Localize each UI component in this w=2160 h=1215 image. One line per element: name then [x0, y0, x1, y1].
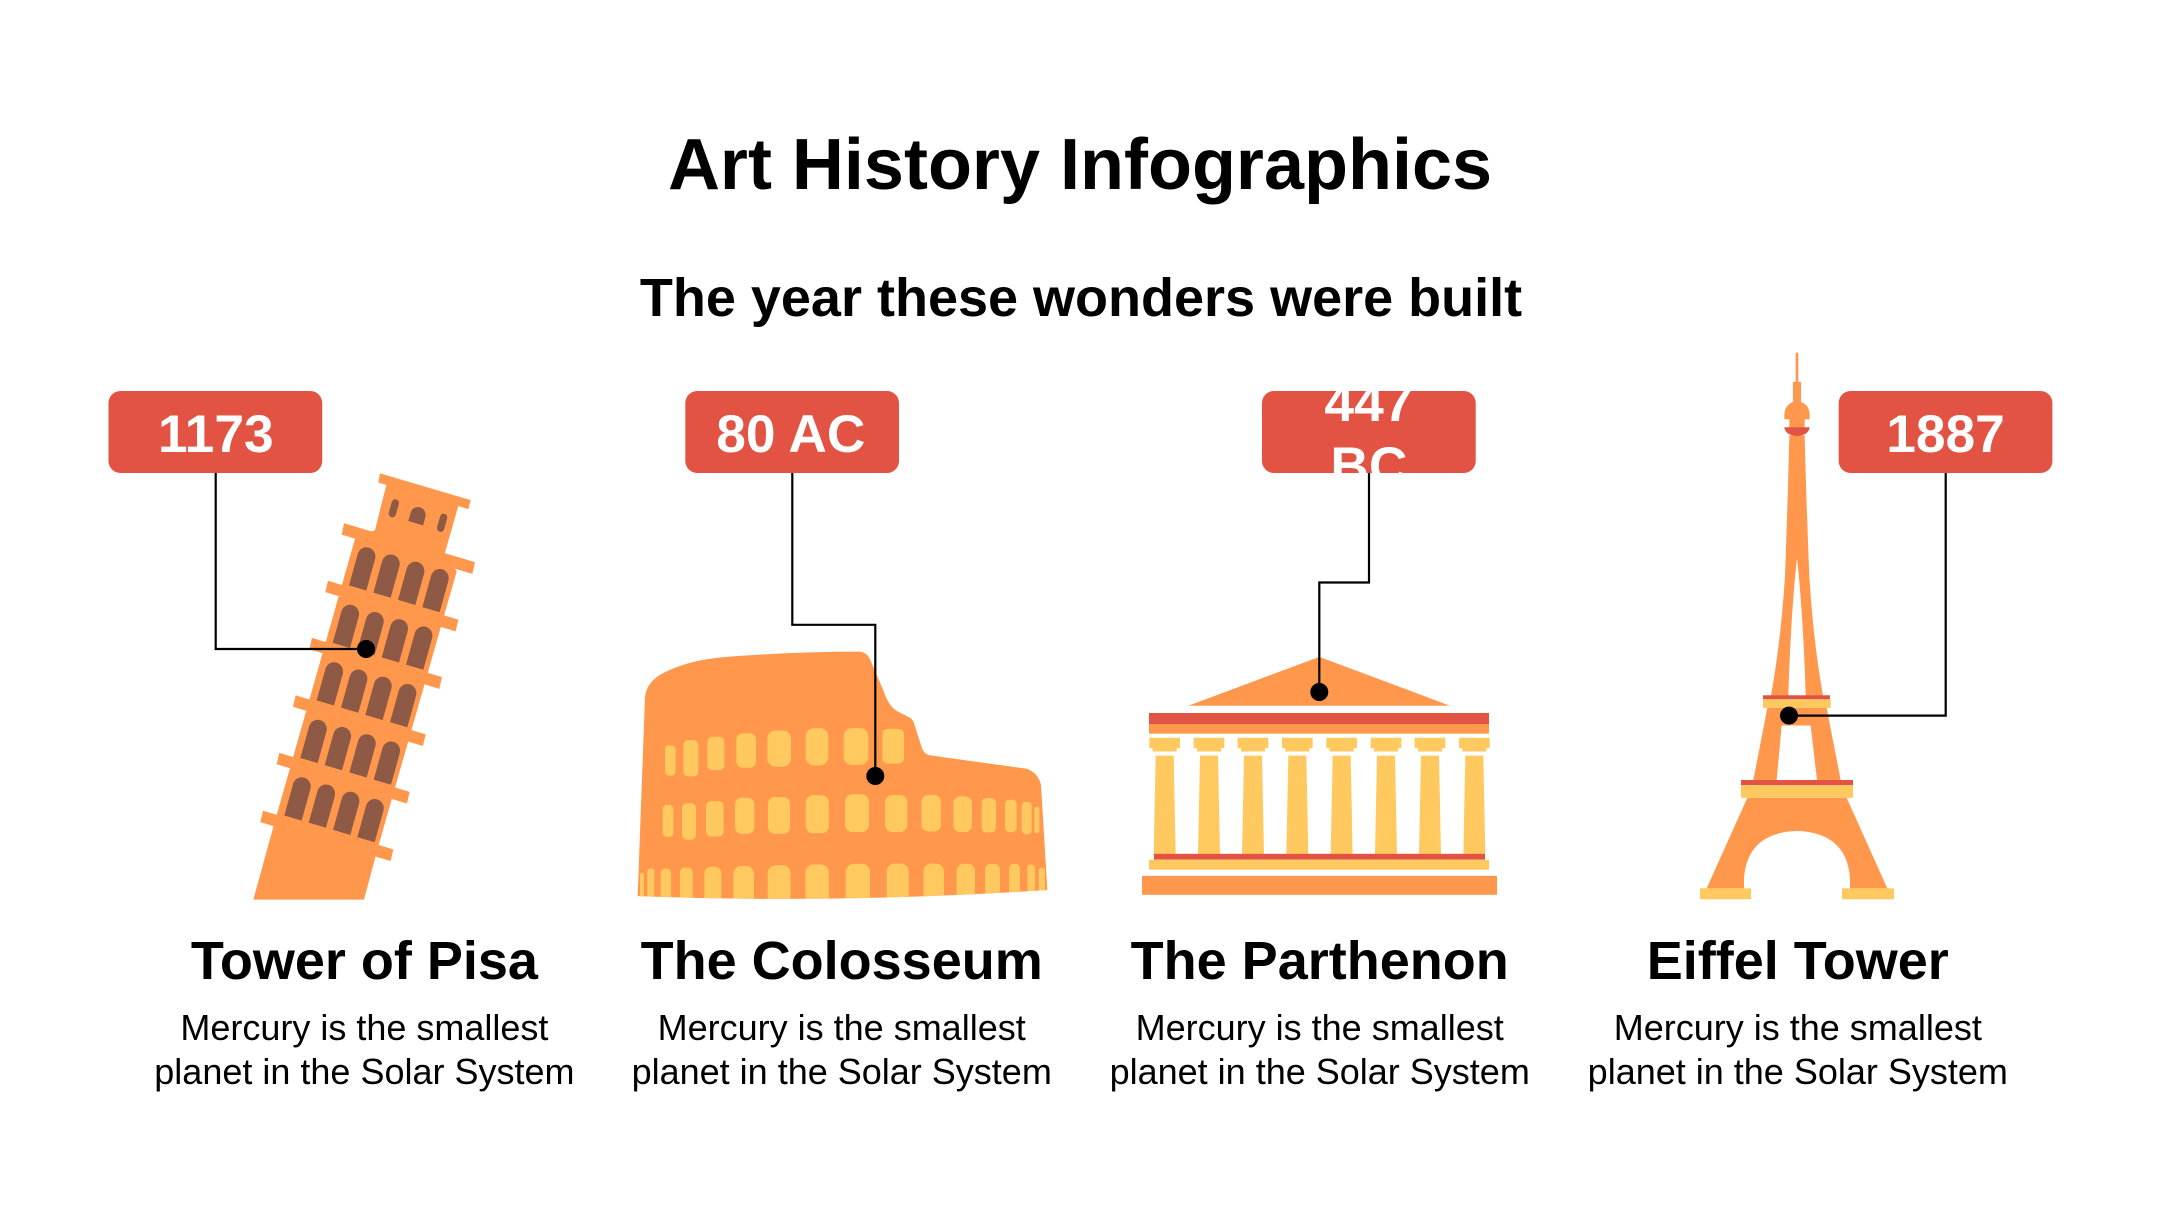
panel: Tower of Pisa	[108, 391, 575, 1092]
year label: 447 BC: 447	[1324, 374, 1413, 433]
year label: 80 AC: 80 AC	[716, 405, 865, 464]
connector line	[216, 473, 366, 649]
description: planet in the Solar System	[1588, 1051, 2008, 1092]
icon: Parthenon	[1142, 657, 1497, 895]
icon: Colosseum	[638, 652, 1047, 911]
marker dot	[1780, 707, 1798, 725]
panel: The Parthenon	[1110, 374, 1530, 1092]
title: Art History Infographics	[668, 125, 1492, 205]
subtitle: The year these wonders were built	[640, 268, 1522, 328]
marker dot	[866, 767, 884, 785]
icon: Eiffel Tower	[1700, 353, 1894, 899]
description: Mercury is the smallest	[1614, 1007, 1982, 1048]
year label: 80 AC	[685, 391, 899, 473]
icon: leaning tower of Pisa	[253, 473, 475, 900]
heading: The Colosseum	[641, 931, 1043, 991]
description: Mercury is the smallest	[658, 1007, 1026, 1048]
panel: Eiffel Tower	[1588, 353, 2052, 1092]
year label: 447 BC: BC	[1330, 437, 1407, 496]
connector line	[792, 473, 875, 776]
connector line	[1789, 473, 1946, 716]
description: planet in the Solar System	[1110, 1051, 1530, 1092]
year label: 1887: 1887	[1886, 405, 2005, 464]
year label: 447 BC	[1262, 391, 1476, 473]
description: Mercury is the smallest	[180, 1007, 548, 1048]
marker dot	[1310, 683, 1328, 701]
panel: The Colosseum	[632, 391, 1052, 1092]
year label: 1173	[108, 391, 322, 473]
description: planet in the Solar System	[632, 1051, 1052, 1092]
description: Mercury is the smallest	[1136, 1007, 1504, 1048]
heading: The Parthenon	[1131, 931, 1509, 991]
year label: 1173: 1173	[158, 405, 274, 464]
connector line	[1319, 473, 1369, 692]
year label: 1887	[1839, 391, 2052, 473]
marker dot	[357, 640, 375, 658]
heading: Eiffel Tower	[1647, 931, 1949, 991]
heading: Tower of Pisa	[191, 931, 539, 991]
description: planet in the Solar System	[154, 1051, 575, 1092]
